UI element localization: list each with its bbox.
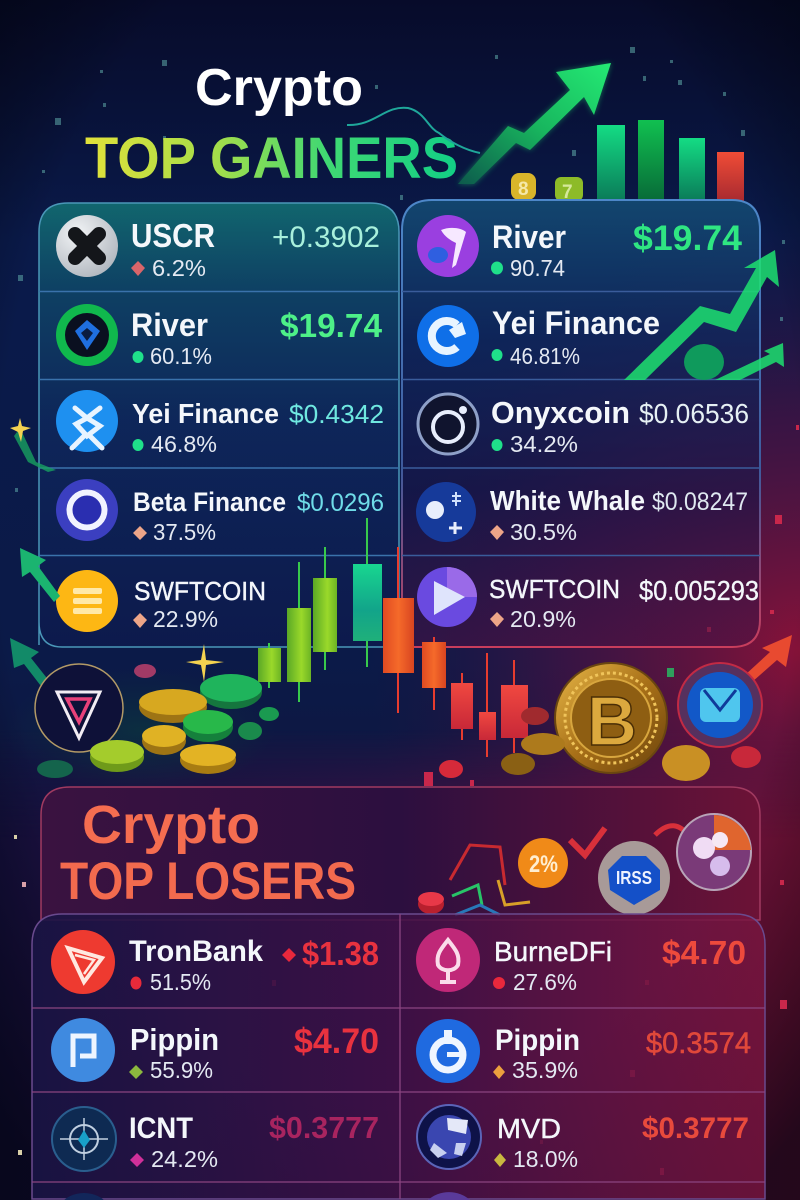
icon: IRSS badge: IRSS bbox=[616, 868, 652, 888]
row: River left: River bbox=[131, 307, 208, 343]
red arrow at right bbox=[745, 635, 792, 682]
icon: 2% coin bbox=[518, 838, 568, 888]
title: TOP LOSERS: TOP LOSERS bbox=[60, 852, 356, 911]
row: TronBank: $1.38 bbox=[302, 935, 379, 972]
row: cut-off icons at bottom edge bbox=[64, 1192, 470, 1200]
row: ICNT: $0.3777 bbox=[269, 1110, 379, 1145]
red and gold coins bbox=[439, 707, 761, 781]
row: Yei Finance right: Yei Finance bbox=[492, 305, 660, 341]
row: MVD bbox=[417, 1105, 749, 1172]
row: Yei Finance left: 46.8% bbox=[151, 431, 217, 457]
row: Beta Finance bbox=[56, 479, 384, 545]
panel: gainers right table bbox=[402, 200, 760, 647]
row: SWFTCOIN left bbox=[56, 570, 266, 632]
row: Pippin right: Pippin bbox=[495, 1024, 580, 1057]
row: River right: $19.74 bbox=[633, 219, 743, 258]
row: Beta Finance: Beta Finance bbox=[133, 487, 286, 517]
icon: Yei Finance swirl bbox=[417, 305, 479, 367]
row: SWFTCOIN right: SWFTCOIN bbox=[489, 574, 620, 604]
row: River left: $19.74 bbox=[280, 307, 383, 344]
row: TronBank bbox=[51, 930, 379, 995]
icon: small red coin bbox=[418, 892, 444, 914]
row: Pippin left: 55.9% bbox=[150, 1057, 213, 1083]
row: Yei Finance left: Yei Finance bbox=[132, 398, 279, 429]
row: Pippin left: $4.70 bbox=[294, 1022, 379, 1061]
row: White Whale: 30.5% bbox=[510, 519, 577, 545]
row: TronBank: TronBank bbox=[129, 935, 263, 968]
title: TOP GAINERS: TOP GAINERS bbox=[85, 126, 458, 191]
icon: River purple bbox=[417, 215, 479, 277]
panel: losers header bbox=[41, 787, 760, 920]
number dice: 8 bbox=[518, 179, 529, 200]
row: Onyxcoin: Onyxcoin bbox=[491, 395, 630, 430]
row: USCR bbox=[56, 215, 380, 281]
number dice bbox=[511, 173, 583, 203]
icon: confetti chevrons bbox=[450, 826, 690, 915]
row: ICNT bbox=[52, 1107, 379, 1172]
icon: ICNT crosshair bbox=[52, 1107, 116, 1171]
red confetti particles bbox=[14, 425, 799, 1175]
row: White Whale: $0.08247 bbox=[652, 488, 748, 516]
row: Pippin right: 35.9% bbox=[512, 1057, 578, 1083]
icon: MVD bbox=[417, 1105, 481, 1169]
row: River left: 60.1% bbox=[150, 343, 212, 369]
row: Onyxcoin: 34.2% bbox=[510, 431, 578, 457]
row: USCR: 6.2% bbox=[152, 255, 206, 281]
icon: gold bitcoin coin bbox=[555, 663, 667, 773]
row: Onyxcoin bbox=[418, 394, 749, 457]
small rising arrows at left edge bbox=[10, 428, 60, 690]
icon: BurneDFi bbox=[416, 928, 480, 992]
icon: 2% coin: 2% bbox=[529, 851, 558, 878]
panel: gainers left table bbox=[39, 203, 399, 647]
row: Pippin right bbox=[416, 1019, 751, 1083]
icon: Onyxcoin ring bbox=[418, 394, 478, 454]
bar chart: rising bars bbox=[597, 120, 744, 201]
candlestick chart bbox=[258, 518, 528, 757]
row: Yei Finance right: 46.81% bbox=[510, 343, 580, 369]
number dice: 7 bbox=[562, 182, 573, 203]
green arrows at right of gainers table bbox=[624, 250, 784, 380]
rising green arrow with thin trend line bbox=[347, 63, 611, 184]
row: SWFTCOIN left: 22.9% bbox=[153, 606, 218, 632]
row: ICNT: 24.2% bbox=[151, 1146, 218, 1172]
icon: SWFTCOIN yellow bbox=[56, 570, 118, 632]
row: White Whale: White Whale bbox=[490, 485, 645, 516]
icon: blue token bbox=[678, 663, 762, 747]
row: BurneDFi: BurneDFi bbox=[494, 936, 612, 967]
row: MVD: 18.0% bbox=[513, 1146, 578, 1172]
icon: IRSS badge bbox=[598, 841, 670, 915]
row: BurneDFi bbox=[416, 928, 746, 995]
icon: River green bbox=[56, 304, 118, 366]
icon: Pippin square bbox=[51, 1018, 115, 1082]
row: Pippin right: $0.3574 bbox=[646, 1027, 751, 1060]
icon: SWFTCOIN play bbox=[417, 567, 477, 627]
title: Crypto losers: Crypto bbox=[82, 795, 260, 855]
row: USCR: +0.3902 bbox=[272, 221, 380, 254]
icon: USCR bbox=[56, 215, 118, 277]
row: Yei Finance left bbox=[56, 390, 384, 457]
row: SWFTCOIN right: 20.9% bbox=[510, 606, 576, 632]
row: SWFTCOIN left: SWFTCOIN bbox=[134, 576, 266, 606]
row: Yei Finance left: $0.4342 bbox=[289, 399, 384, 429]
starfield particles bbox=[15, 47, 785, 492]
row: Beta Finance: $0.0296 bbox=[297, 489, 384, 517]
green and gold coin pile bbox=[37, 664, 279, 778]
panel: losers table bbox=[32, 914, 765, 1199]
row: TronBank: 51.5% bbox=[150, 969, 211, 995]
row: Pippin left: Pippin bbox=[130, 1022, 219, 1057]
icon: triangle token bbox=[35, 664, 123, 752]
row: USCR: USCR bbox=[131, 217, 215, 254]
icon: White Whale bbox=[416, 482, 476, 542]
row: MVD: $0.3777 bbox=[642, 1112, 749, 1145]
icon: Pippin G bbox=[416, 1019, 480, 1083]
icon: gold sparkles bbox=[10, 418, 224, 682]
icon: TronBank bbox=[51, 930, 115, 994]
row: BurneDFi: $4.70 bbox=[662, 934, 746, 971]
row: Onyxcoin: $0.06536 bbox=[639, 398, 749, 429]
row: BurneDFi: 27.6% bbox=[513, 969, 577, 995]
row: River right bbox=[417, 215, 743, 281]
icon: gold bitcoin coin: B bbox=[587, 682, 637, 760]
icon: purple token bbox=[677, 814, 751, 890]
icon: Beta Finance bbox=[56, 479, 118, 541]
row: MVD: MVD bbox=[497, 1113, 561, 1144]
row: SWFTCOIN right bbox=[417, 567, 759, 632]
row: Pippin left bbox=[51, 1018, 379, 1083]
row: River right: 90.74 bbox=[510, 255, 565, 281]
row: ICNT: ICNT bbox=[129, 1112, 193, 1145]
title: Crypto: Crypto bbox=[195, 59, 363, 117]
row: SWFTCOIN right: $0.005293 bbox=[639, 575, 759, 606]
row: River left bbox=[56, 304, 383, 369]
row: Yei Finance right bbox=[417, 305, 660, 369]
icon: Yei Finance blue bbox=[56, 390, 118, 452]
row: River right: River bbox=[492, 219, 566, 255]
row: Beta Finance: 37.5% bbox=[153, 519, 216, 545]
row: White Whale bbox=[416, 482, 748, 545]
